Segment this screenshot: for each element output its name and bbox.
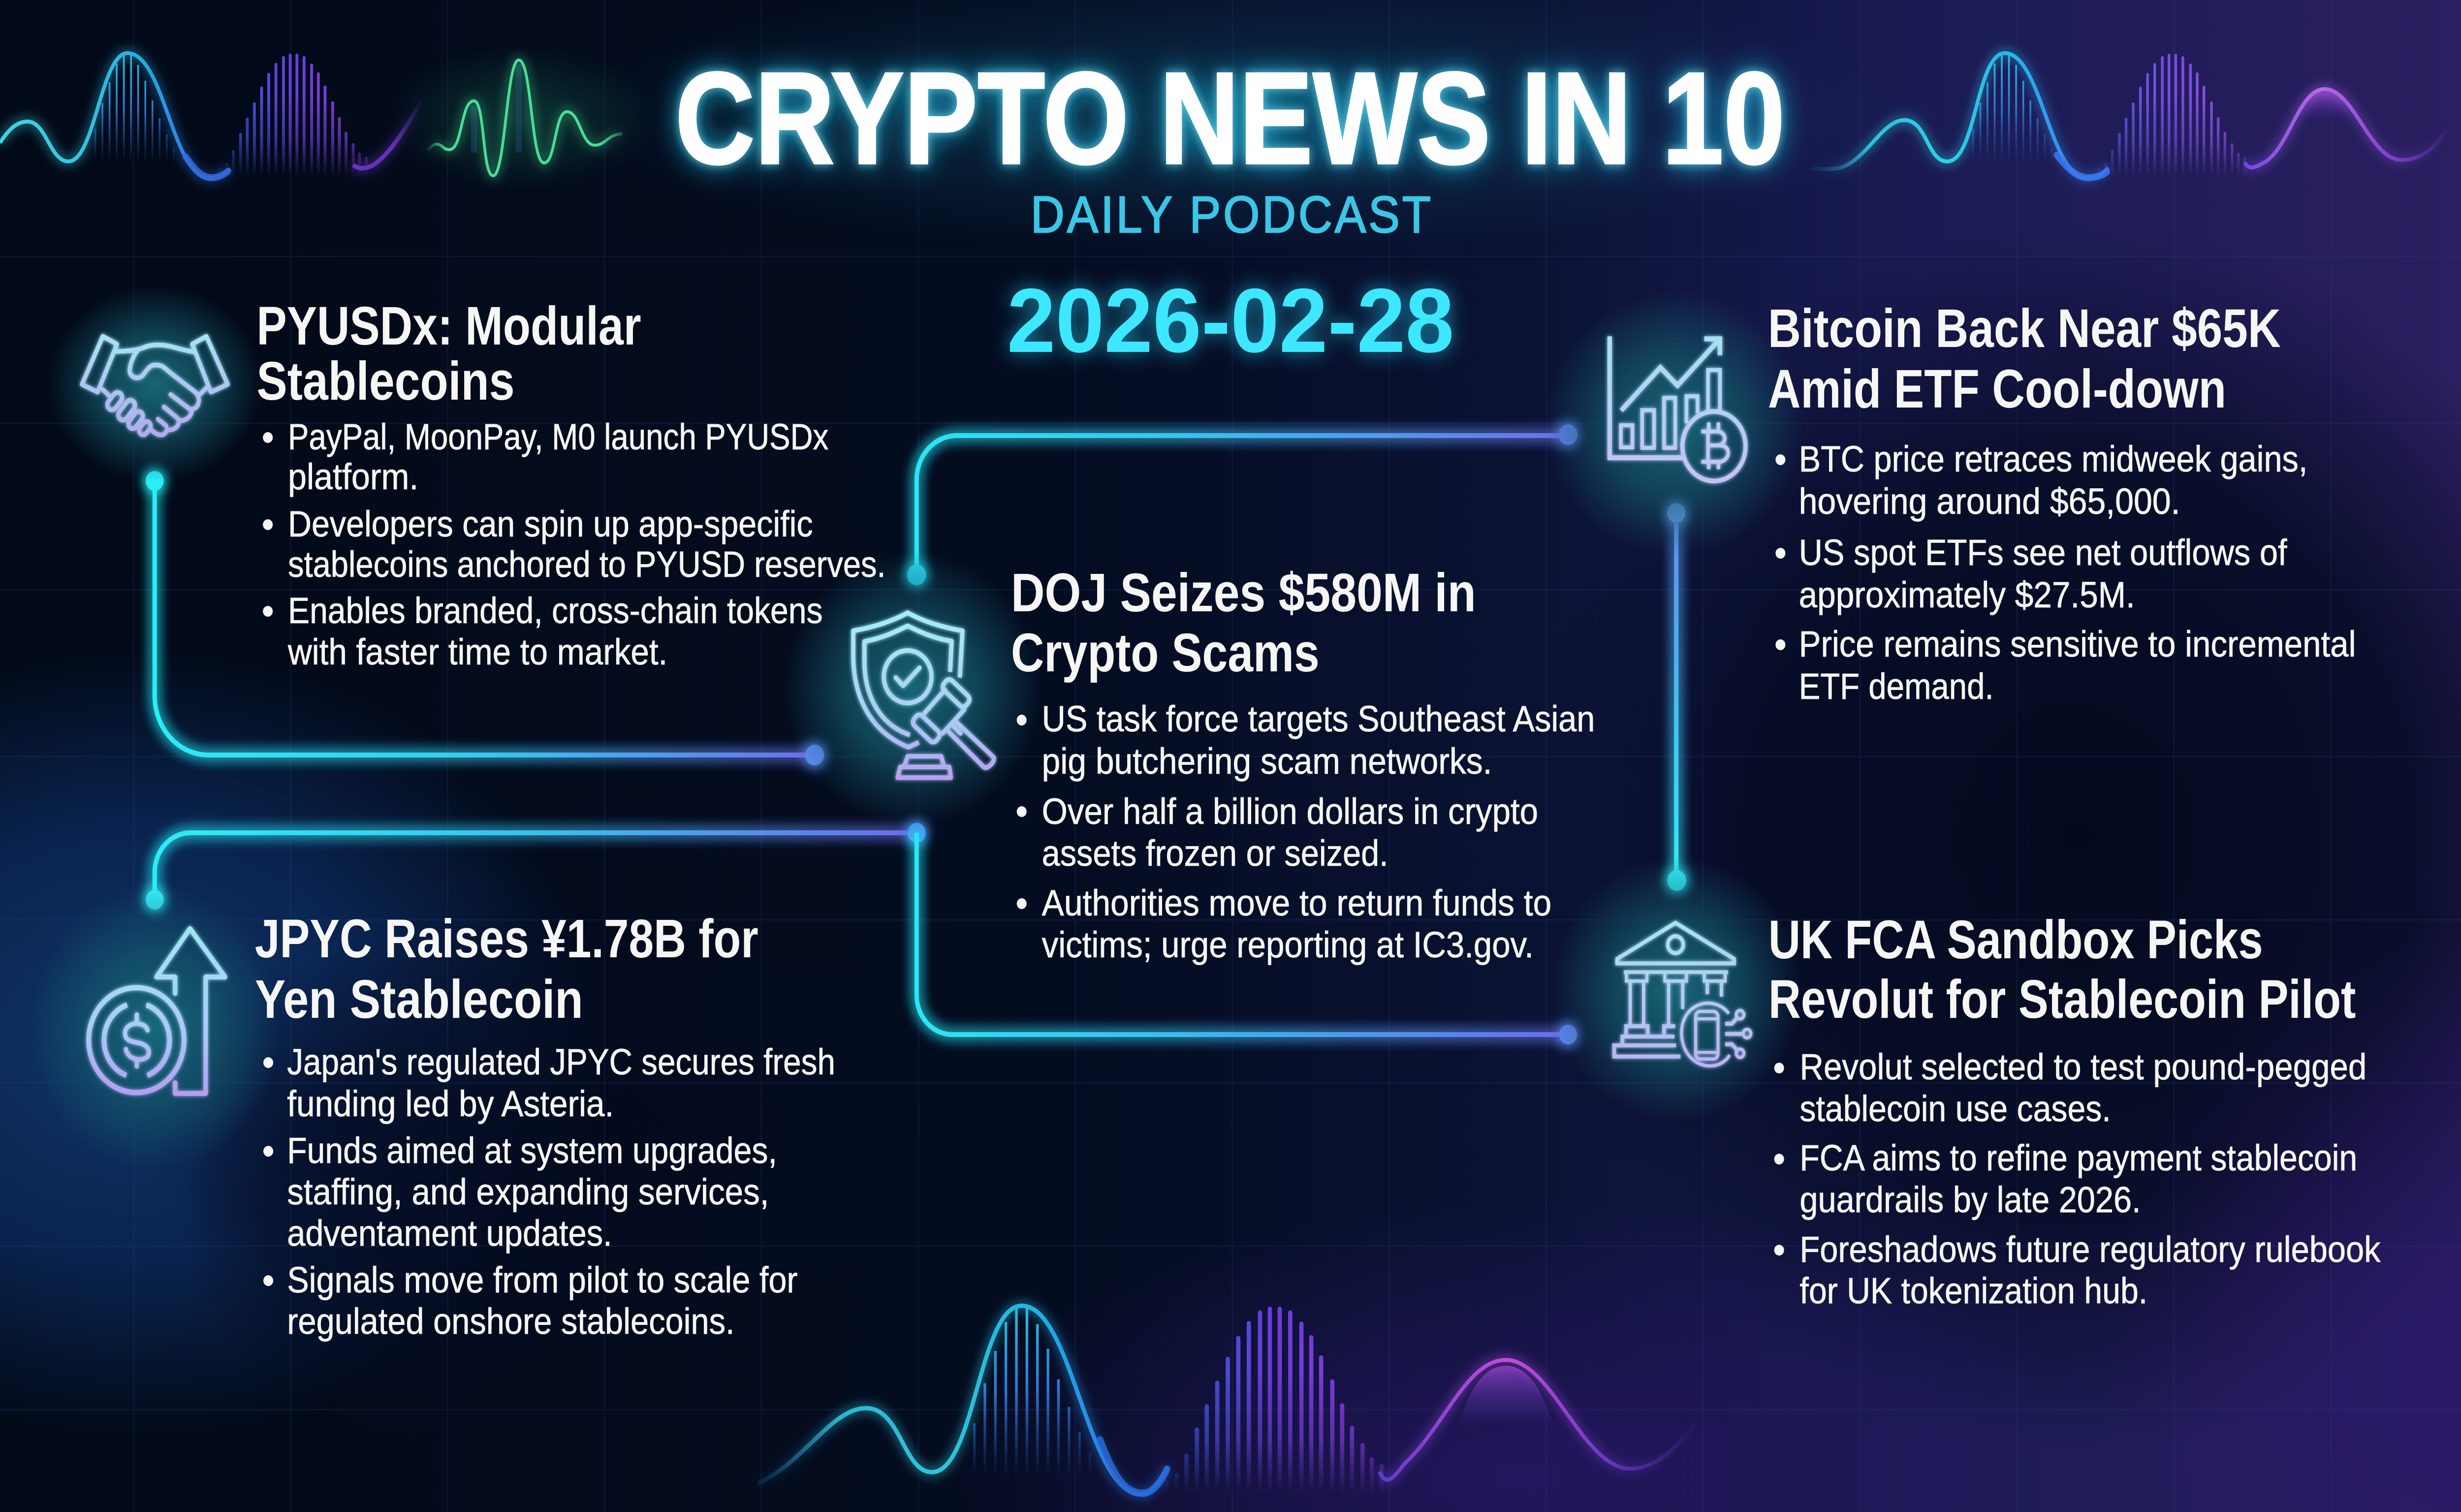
bullet list: funding led by Asteria. [287,1083,614,1124]
panel: Bitcoin [1768,299,2356,707]
heading: Amid ETF Cool-down [1768,359,2226,419]
subtitle: DAILY PODCAST [1031,186,1431,244]
bullet list: PayPal, MoonPay, M0 launch PYUSDx [288,416,828,457]
bullet list: regulated onshore stablecoins. [287,1301,735,1342]
bullet list [1774,1046,2381,1311]
connector: Bitcoin to UK FCA [1668,503,1686,891]
connector: PYUSDx to DOJ [146,471,824,765]
panel: PYUSDx [256,296,886,672]
waveform: green [389,44,657,192]
bullet list: Developers can spin up app-specific [288,504,813,544]
heading: JPYC Raises ¥1.78B for [255,909,758,969]
heading: UK FCA Sandbox Picks [1768,910,2263,970]
bullet list [263,416,886,672]
icon: shield and gavel [783,551,1042,827]
bullet list: US task force targets Southeast Asian [1042,698,1595,739]
connector: DOJ to UK FCA [916,833,1577,1044]
heading: Stablecoins [256,351,515,411]
bullet list: Foreshadows future regulatory rulebook [1799,1229,2381,1270]
title: CRYPTO NEWS IN 10 [675,45,1785,191]
bullet list: hovering around $65,000. [1799,481,2180,522]
bullet list: Funds aimed at system upgrades, [287,1130,777,1171]
bullet list: Enables branded, cross-chain tokens [288,590,823,631]
heading: Crypto Scams [1011,623,1320,683]
heading: Yen Stablecoin [255,970,583,1030]
bullet list: approximately $27.5M. [1799,574,2135,615]
bullet list: pig butchering scam networks. [1042,741,1492,782]
bullet list: Authorities move to return funds to [1042,882,1551,923]
waveform: bottom center [758,1306,1696,1494]
bullet list: BTC price retraces midweek gains, [1799,439,2307,479]
bullet list: Signals move from pilot to scale for [287,1260,798,1300]
bullet list: ETF demand. [1799,666,1994,707]
waveform: top right [1810,53,2447,178]
panel: UK FCA [1768,910,2381,1311]
heading [256,296,641,411]
bullet list: stablecoin use cases. [1799,1088,2111,1129]
heading: DOJ Seizes $580M in [1011,563,1476,623]
connector: DOJ to Bitcoin [907,424,1578,585]
bullet list: assets frozen or seized. [1042,833,1388,874]
heading: Bitcoin Back Near $65K [1768,299,2281,359]
bullet list: Japan's regulated JPYC secures fresh [287,1041,835,1082]
bullet list: platform. [288,456,418,497]
heading [255,909,758,1030]
bullet list [1775,439,2356,707]
bullet list: guardrails by late 2026. [1799,1179,2141,1220]
bullet list: victims; urge reporting at IC3.gov. [1042,924,1534,965]
heading [1768,299,2281,419]
bullet list: Price remains sensitive to incremental [1799,624,2356,664]
bullet list: staffing, and expanding services, [287,1171,769,1212]
icon: dollar coin with arrow [29,886,280,1171]
bullet list: with faster time to market. [287,631,667,672]
icon: bitcoin chart [1545,290,1804,556]
heading: PYUSDx: Modular [256,296,641,356]
icon: bank and phone [1551,856,1802,1122]
bullet list [1017,698,1595,965]
bullet list: stablecoins anchored to PYUSD reserves. [288,544,886,585]
waveform: top left [0,53,421,178]
bullet list: adventament updates. [287,1213,612,1254]
bullet list: Over half a billion dollars in crypto [1042,791,1538,832]
bullet list: US spot ETFs see net outflows of [1799,532,2287,573]
panel: DOJ [1011,563,1595,965]
bullet list [263,1041,835,1342]
panel: JPYC [255,909,835,1342]
date: 2026-02-28 [1007,270,1454,372]
heading: Revolut for Stablecoin Pilot [1768,970,2356,1030]
bullet list: FCA aims to refine payment stablecoin [1799,1137,2357,1178]
icon: handshake [47,285,262,482]
bullet list: Revolut selected to test pound-pegged [1799,1046,2366,1087]
connector: JPYC to DOJ [146,823,925,910]
heading [1011,563,1476,683]
bullet list: for UK tokenization hub. [1799,1270,2147,1311]
heading [1768,910,2356,1030]
